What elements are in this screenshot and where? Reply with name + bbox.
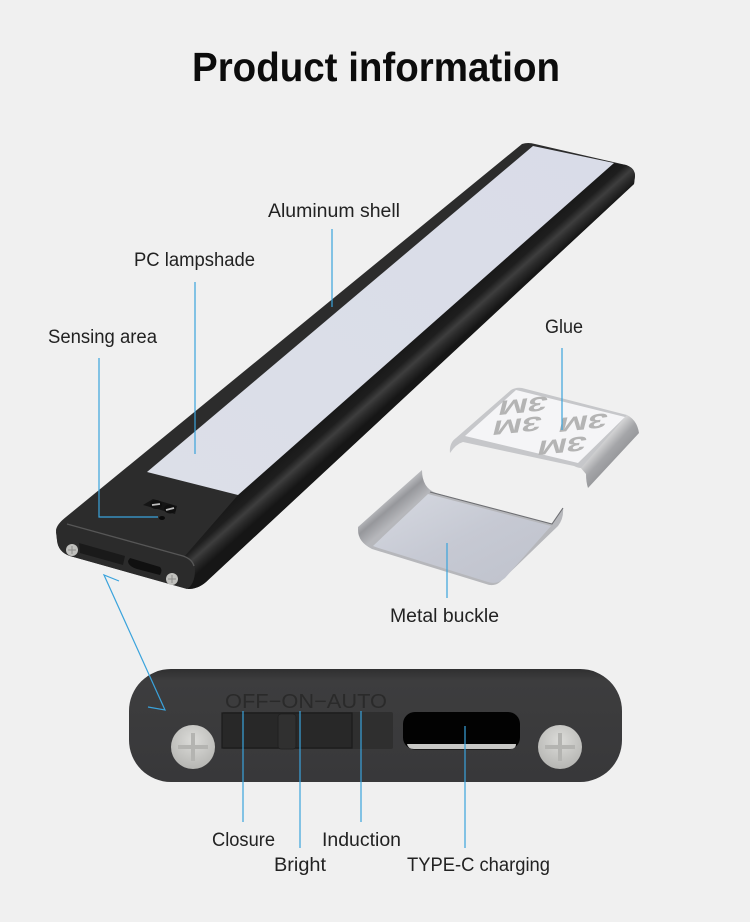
label: glue: Glue xyxy=(545,317,583,338)
usb-c metal strip xyxy=(407,744,516,749)
glue clip xyxy=(450,388,639,488)
label: PC lampshade: PC lampshade xyxy=(134,250,255,271)
front edge highlight xyxy=(67,524,194,566)
3M marks: 3M xyxy=(496,391,550,419)
label: bright: Bright xyxy=(274,855,327,876)
leader: induction xyxy=(360,711,362,822)
sensor dot xyxy=(159,516,165,520)
clip rear curl xyxy=(580,415,639,488)
3M marks: 3M xyxy=(490,411,544,439)
small switch slot xyxy=(79,543,125,565)
end plate xyxy=(129,669,622,782)
label: closure: Closure xyxy=(212,830,275,851)
light bar product xyxy=(56,143,635,589)
buckle inner face xyxy=(373,494,551,583)
bar body xyxy=(56,143,635,589)
small screw left xyxy=(66,544,78,556)
title: Product information xyxy=(192,44,560,90)
leader: PC lampshade xyxy=(194,282,196,454)
lampshade xyxy=(147,146,614,495)
buckle outer wall xyxy=(358,470,563,585)
bar long side xyxy=(184,163,635,589)
mode labels: OFF−ON−AUTO xyxy=(225,691,387,713)
label: sensing area: Sensing area xyxy=(48,327,157,348)
3M marks: 3M xyxy=(556,408,610,436)
leader: closure xyxy=(242,711,244,822)
sensor window xyxy=(143,499,177,514)
leader: type-c xyxy=(464,726,466,848)
screw left xyxy=(171,725,215,769)
screw right xyxy=(538,725,582,769)
adhesive pad xyxy=(465,390,625,463)
leader: bright xyxy=(299,711,301,848)
leader: aluminum shell xyxy=(331,229,333,307)
arrow linking bar end to detail xyxy=(104,575,165,710)
usb-c port xyxy=(403,712,520,750)
sensor lens right xyxy=(164,504,176,514)
small screw right xyxy=(166,573,178,585)
label: aluminum shell: Aluminum shell xyxy=(268,201,400,222)
sensor lens left xyxy=(150,500,162,509)
switch slot xyxy=(222,712,393,749)
label: type-c charging: TYPE-C charging xyxy=(407,855,550,876)
label: induction: Induction xyxy=(322,830,401,851)
clip outer rim xyxy=(450,388,627,468)
switch knob xyxy=(278,714,296,749)
buckle top edge xyxy=(430,492,563,524)
leader: sensing area xyxy=(99,358,158,517)
detail end view xyxy=(129,669,622,782)
leader: metal buckle xyxy=(446,543,448,598)
metal buckle xyxy=(358,470,563,585)
3M marks: 3M xyxy=(535,431,589,459)
switch slider xyxy=(222,713,352,748)
small usb port xyxy=(128,558,162,575)
label: metal buckle: Metal buckle xyxy=(390,606,499,627)
bar front face xyxy=(56,524,195,589)
3M marks xyxy=(490,391,610,459)
leader: glue xyxy=(561,348,563,430)
